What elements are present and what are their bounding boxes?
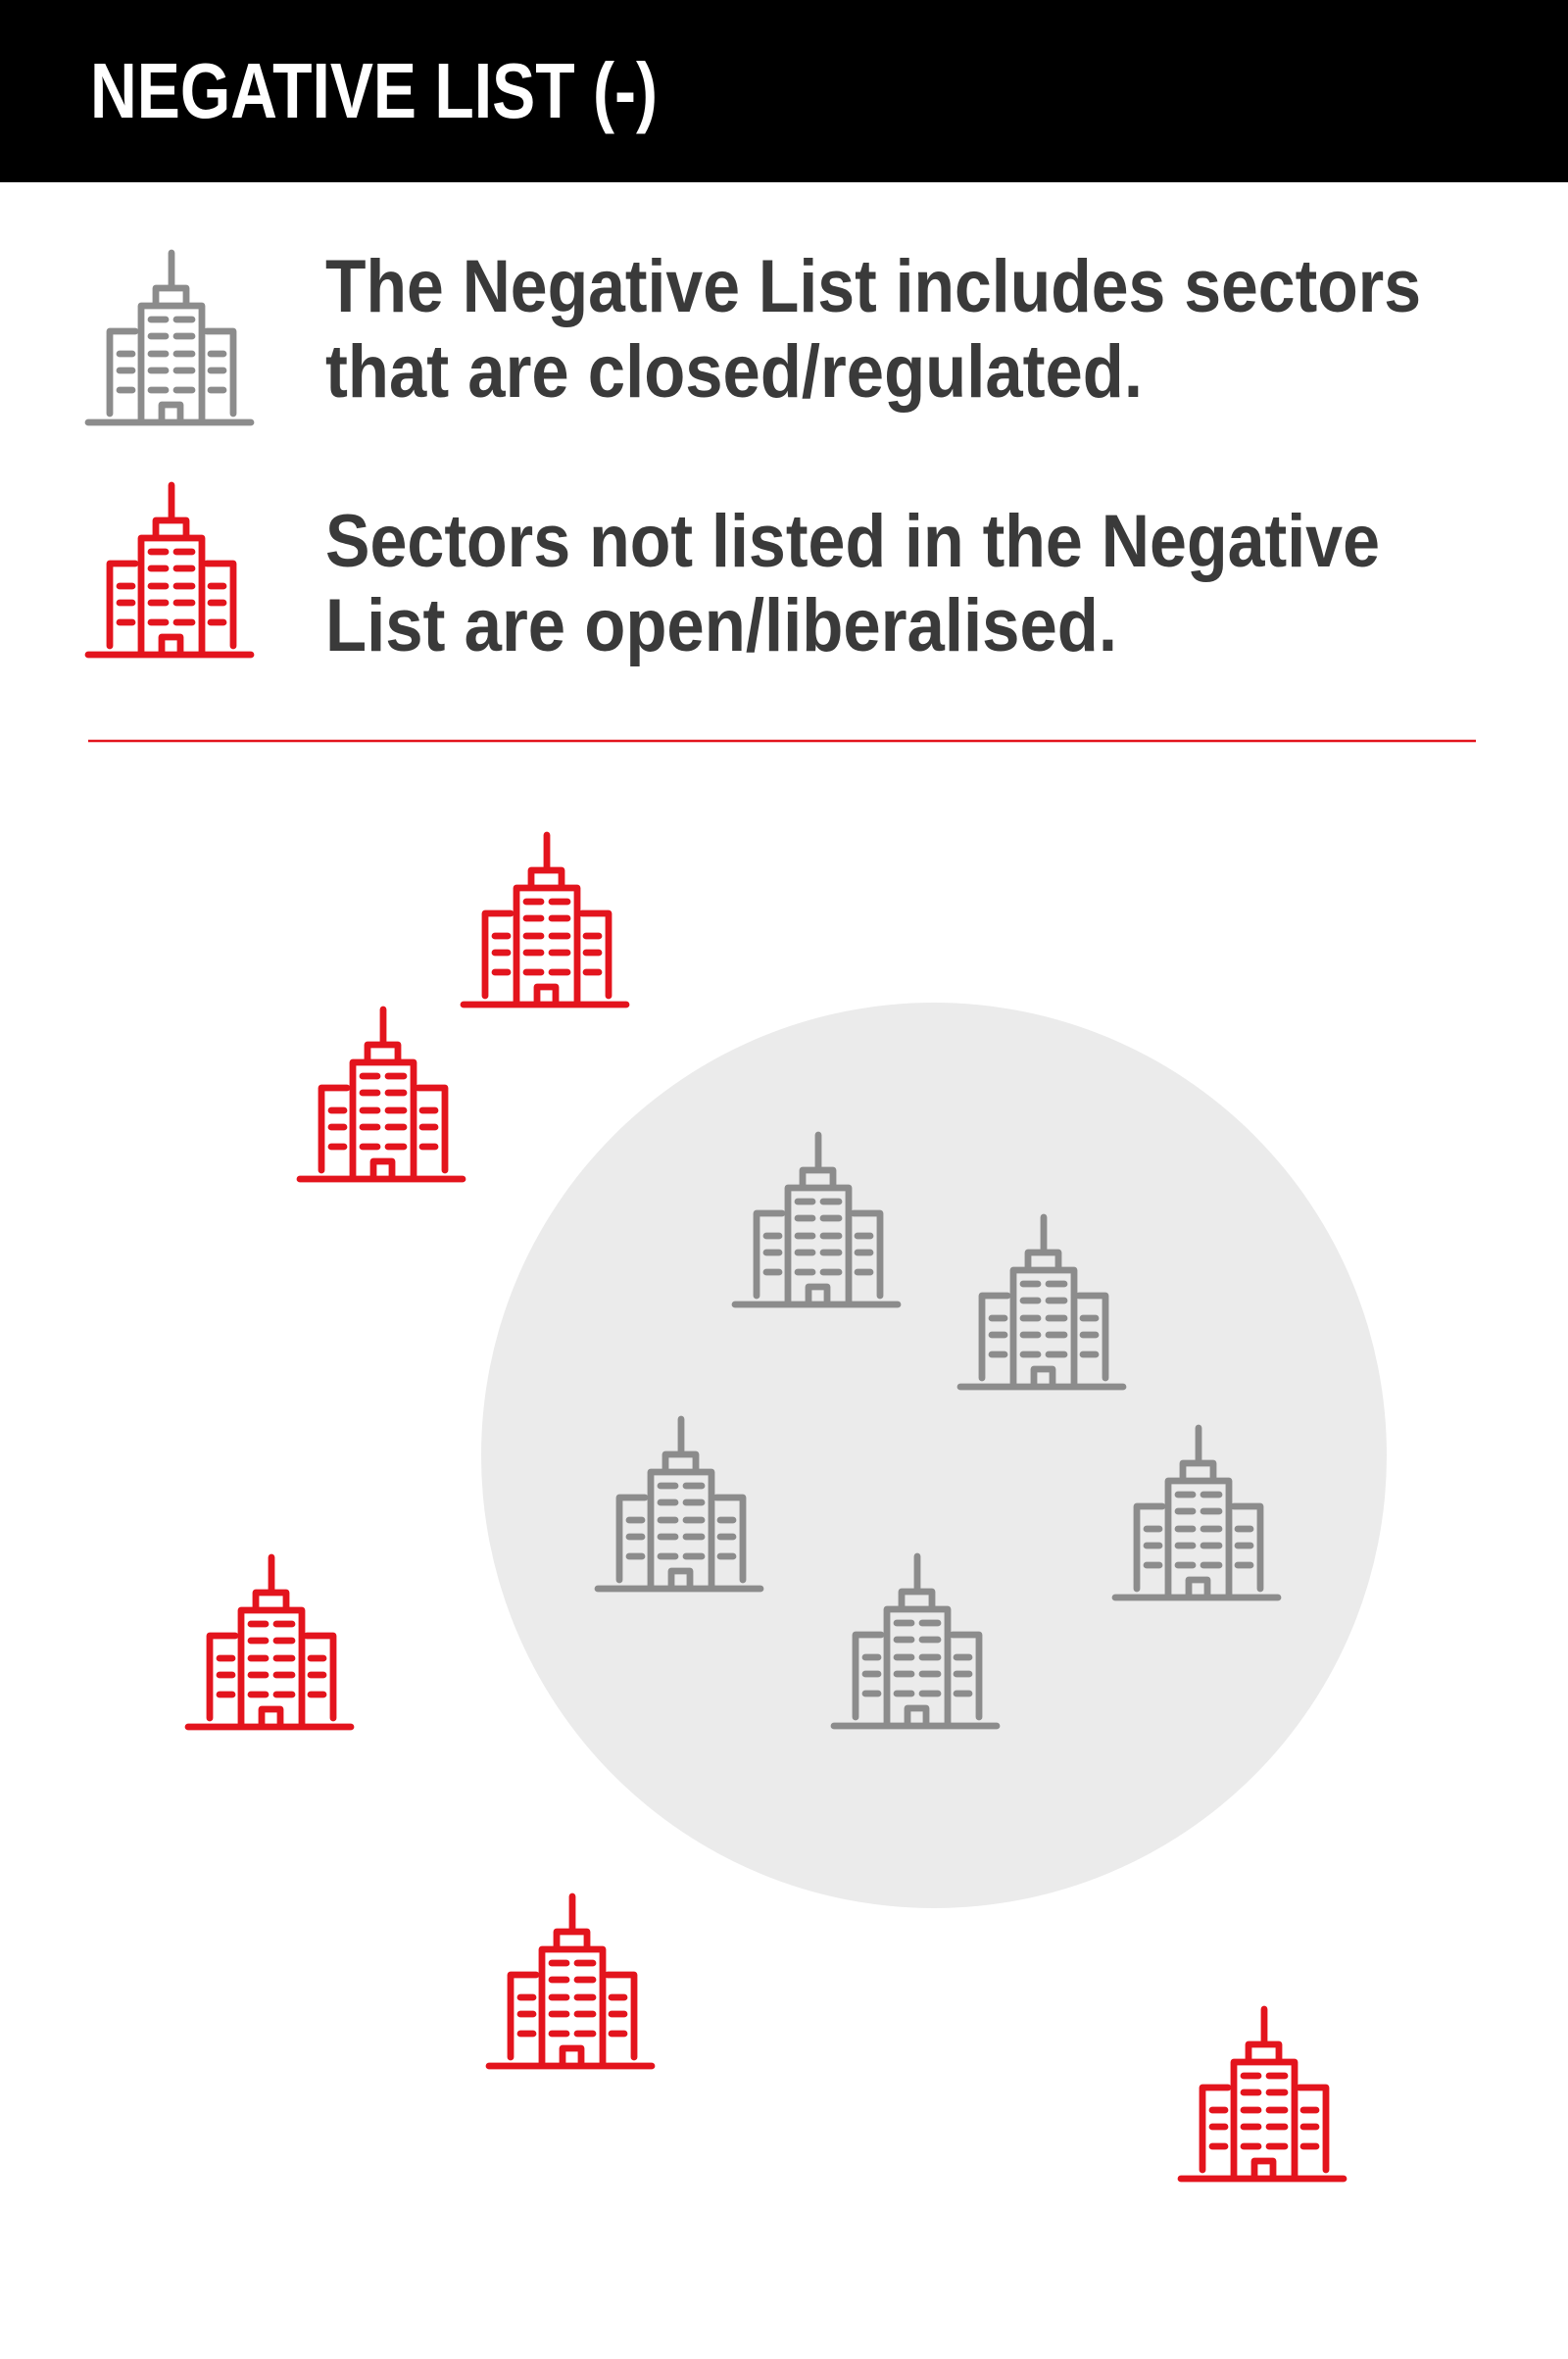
- text: closed/regulated: that are closed/regulated.: [325, 330, 1143, 414]
- text: open/liberalised: [325, 500, 1380, 667]
- circle: negative list area: [481, 1003, 1387, 1908]
- legend: open/liberalised: [88, 485, 1380, 667]
- gray buildings inside circle: [598, 1135, 1278, 1726]
- header bar: [0, 0, 1568, 182]
- icon: gray building: [88, 253, 251, 422]
- text: closed/regulated: [325, 245, 1421, 414]
- red buildings outside circle: [188, 835, 1344, 2179]
- text: open/liberalised: List are open/liberalised.: [325, 584, 1117, 667]
- text: open/liberalised: Sectors not listed in the Negative: [325, 500, 1380, 583]
- legend: closed/regulated: [88, 245, 1421, 422]
- text: closed/regulated: The Negative List includes sectors: [325, 245, 1421, 328]
- icon: red building: [88, 485, 251, 655]
- title: NEGATIVE LIST (-): [90, 47, 658, 134]
